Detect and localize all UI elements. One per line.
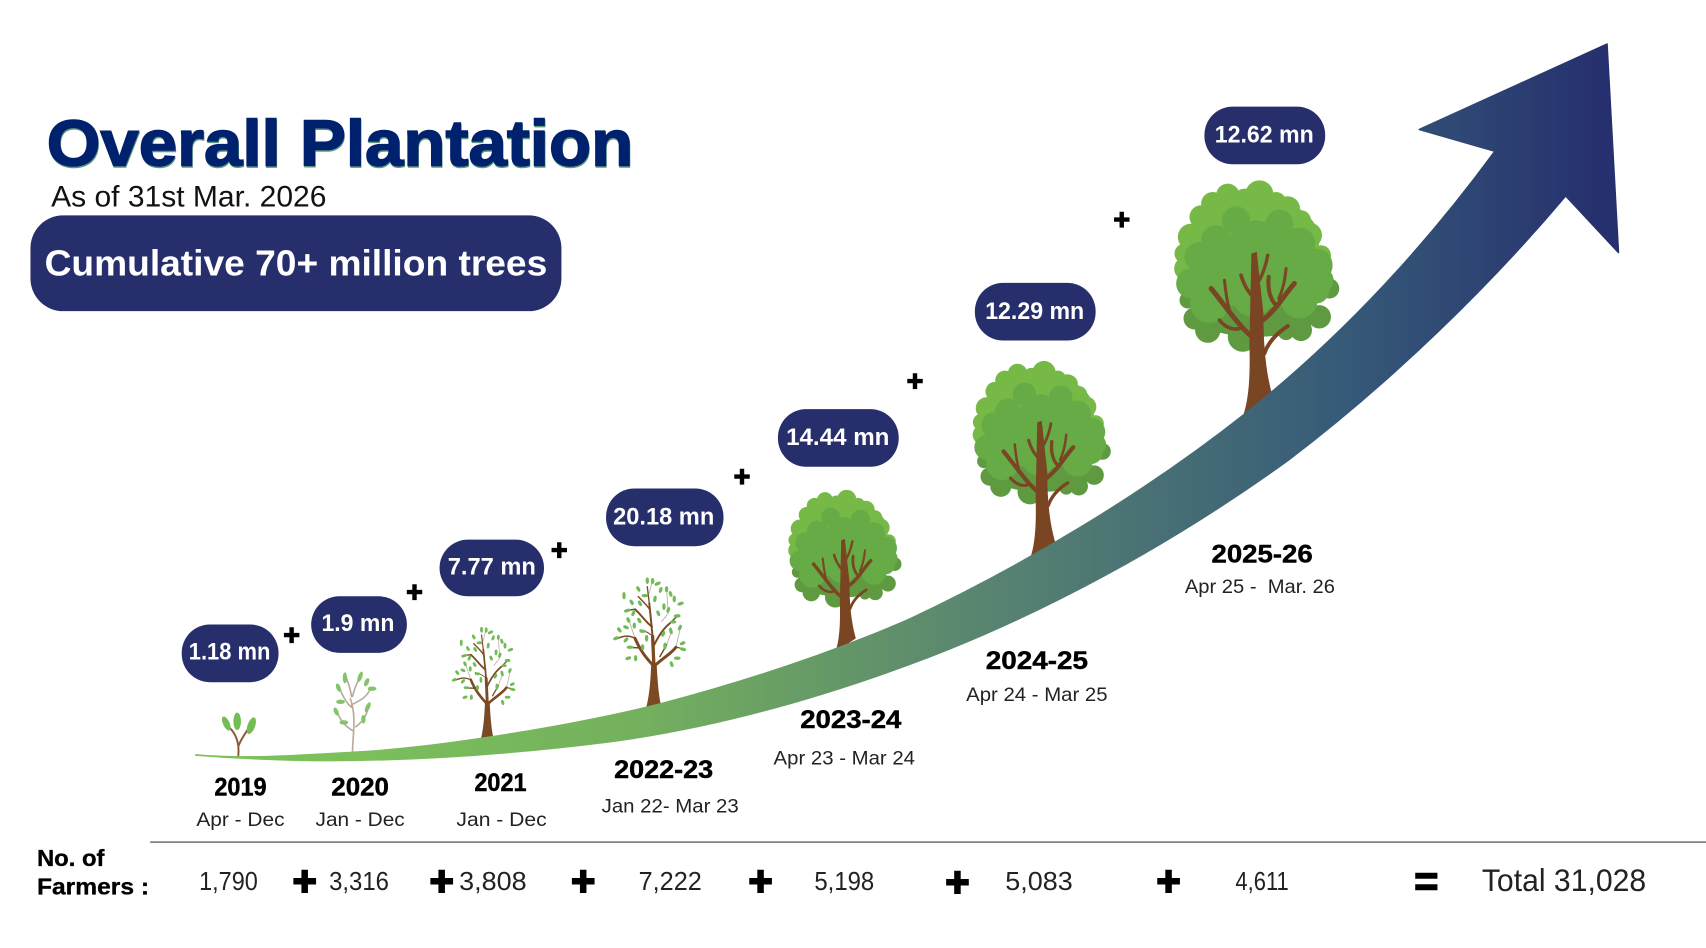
farmers row label xyxy=(37,845,149,899)
value pill: 2023-24 xyxy=(778,409,899,467)
farmers row values: 5,198 xyxy=(814,866,874,896)
period label: 2025-26: Apr 25 - Mar. 26 xyxy=(1185,576,1335,598)
period label: 2020: 2020 xyxy=(331,773,389,801)
period label: 2022-23: Jan 22- Mar 23 xyxy=(602,796,739,818)
value pill: 2019 xyxy=(182,625,279,682)
banner: cumulative total: Cumulative 70+ million trees xyxy=(45,243,547,283)
value pill: 2020: 1.9 mn xyxy=(322,610,394,637)
icon: tree 2025-26 xyxy=(1174,180,1339,417)
period label: 2019: 2019 xyxy=(214,773,267,801)
farmers row plus signs: + xyxy=(945,860,970,906)
farmers row values: 1,790 xyxy=(199,866,258,896)
period label: 2019 xyxy=(196,773,285,831)
value pill: 2025-26 xyxy=(1204,107,1325,164)
value pill: 2024-25 xyxy=(975,283,1096,341)
farmers row values: 3,808 xyxy=(459,866,527,896)
subtitle: date: As of 31st Mar. 2026 xyxy=(51,181,326,214)
period label: 2022-23 xyxy=(602,756,739,818)
plus signs between pills: + xyxy=(551,534,567,566)
icon: tree 2022-23 xyxy=(613,578,686,707)
farmers total: Total 31,028 xyxy=(1482,862,1646,898)
plus signs between pills xyxy=(283,204,1130,651)
period label: 2021 xyxy=(456,769,547,831)
value pill: 2022-23 xyxy=(606,489,724,546)
plus signs between pills: + xyxy=(406,576,423,608)
period label: 2025-26 xyxy=(1185,541,1335,598)
plus signs between pills: + xyxy=(283,619,300,651)
period label: 2021: 2021 xyxy=(474,769,527,797)
plus signs between pills: + xyxy=(734,460,750,492)
value pill: 2025-26: 12.62 mn xyxy=(1215,122,1314,149)
period label: 2019: Apr - Dec xyxy=(196,809,285,831)
period label: 2023-24: 2023-24 xyxy=(800,706,902,734)
value pill: 2019: 1.18 mn xyxy=(189,638,270,665)
farmers row plus signs: + xyxy=(293,858,317,904)
farmers row label: No. of xyxy=(37,845,105,871)
icon: tree 2023-24 xyxy=(788,490,902,652)
value pill: 2024-25: 12.29 mn xyxy=(985,298,1084,325)
value pill: 2021 xyxy=(440,540,544,596)
value pill: 2020 xyxy=(311,596,407,653)
value pill: 2021: 7.77 mn xyxy=(448,553,536,580)
period label: 2020: Jan - Dec xyxy=(316,809,405,831)
farmers row plus signs: + xyxy=(748,858,773,904)
period label: 2025-26: 2025-26 xyxy=(1211,541,1313,569)
farmers row plus signs xyxy=(293,858,1181,906)
banner: cumulative total xyxy=(30,215,561,311)
equals sign: = xyxy=(1414,858,1438,904)
title: Overall Plantation xyxy=(47,108,634,181)
title: Overall Plantation xyxy=(47,106,633,179)
plus signs between pills: + xyxy=(1113,204,1130,236)
icon: young tree 2021 xyxy=(452,627,515,740)
farmers row values: 4,611 xyxy=(1235,866,1289,896)
farmers row values: 7,222 xyxy=(639,866,702,896)
farmers row plus signs: + xyxy=(430,858,454,904)
icon: sapling 2020 xyxy=(332,671,376,753)
period label: 2020 xyxy=(316,773,405,831)
value pill: 2022-23: 20.18 mn xyxy=(613,503,714,530)
period label: 2024-25: 2024-25 xyxy=(986,647,1088,675)
plus signs between pills: + xyxy=(907,365,923,397)
period label: 2023-24: Apr 23 - Mar 24 xyxy=(774,747,915,769)
value pill: 2023-24: 14.44 mn xyxy=(786,424,889,451)
period label: 2024-25: Apr 24 - Mar 25 xyxy=(966,684,1108,706)
farmers row values xyxy=(199,866,1289,896)
period label: 2022-23: 2022-23 xyxy=(614,756,713,784)
farmers row values: 5,083 xyxy=(1005,866,1073,896)
period label: 2023-24 xyxy=(774,706,915,769)
farmers row plus signs: + xyxy=(1156,858,1181,904)
icon: seedling 2019 xyxy=(220,713,258,756)
farmers row values: 3,316 xyxy=(329,866,389,896)
period label: 2024-25 xyxy=(966,647,1108,706)
arrow: growth curve xyxy=(196,44,1618,761)
farmers row label: Farmers : xyxy=(37,873,149,899)
farmers row plus signs: + xyxy=(571,858,595,904)
period label: 2021: Jan - Dec xyxy=(456,809,547,831)
icon: tree 2024-25 xyxy=(973,361,1111,559)
